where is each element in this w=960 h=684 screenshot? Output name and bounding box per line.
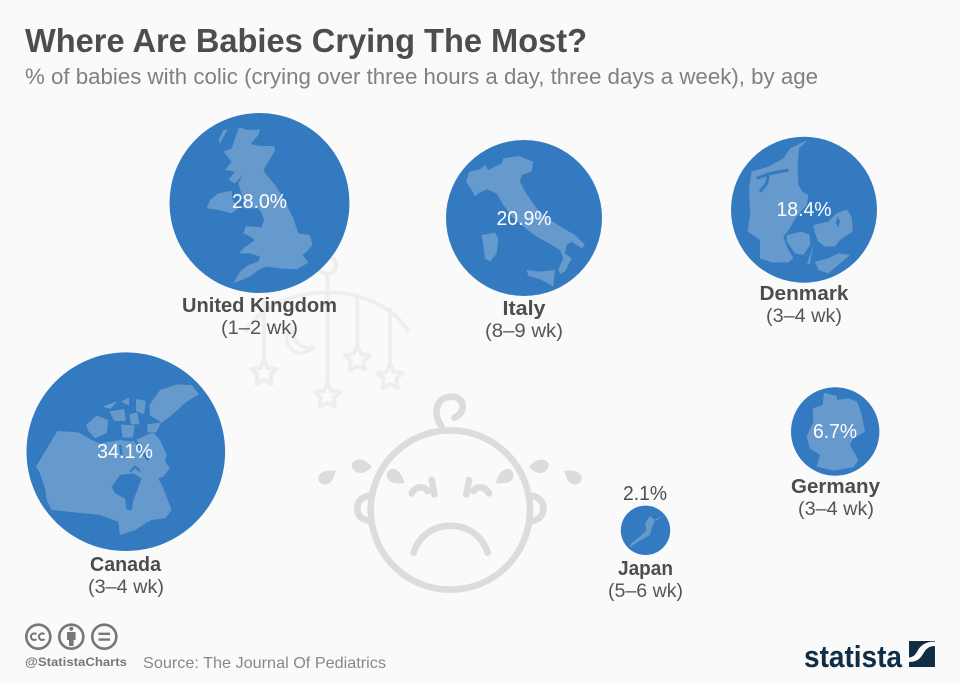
bubble: United Kingdom <box>170 113 350 339</box>
map: Germany <box>807 393 865 471</box>
bubble: Denmark <box>731 137 877 327</box>
label: Japan: Japan <box>618 558 673 580</box>
icon: statista mark <box>909 641 935 667</box>
icon: baby mobile <box>246 256 408 407</box>
bubble: Japan <box>608 483 683 602</box>
logo: statista: statista <box>804 639 903 674</box>
map: Japan <box>630 515 665 547</box>
age: Germany: (3–4 wk) <box>798 499 874 520</box>
label: United Kingdom: United Kingdom <box>182 295 337 317</box>
title: Where Are Babies Crying The Most? <box>25 22 587 59</box>
map: Canada <box>36 384 199 535</box>
value: United Kingdom: 28.0% <box>232 191 287 213</box>
label: Italy: Italy <box>502 298 546 320</box>
bubble: Italy <box>446 140 602 342</box>
label: Germany: Germany <box>791 476 881 498</box>
handle: @StatistaCharts <box>25 655 127 669</box>
value: Denmark: 18.4% <box>776 199 832 221</box>
age: Italy: (8–9 wk) <box>485 321 563 342</box>
icon: crying baby face <box>318 397 582 590</box>
source: Source: The Journal Of Pediatrics <box>143 655 386 672</box>
bubble: Canada <box>26 352 225 598</box>
label: Canada: Canada <box>90 554 162 576</box>
value: Italy: 20.9% <box>496 208 552 230</box>
age: Denmark: (3–4 wk) <box>766 306 842 327</box>
map: Denmark <box>748 140 853 273</box>
age: Canada: (3–4 wk) <box>88 577 164 598</box>
map: Italy <box>466 156 585 287</box>
age: United Kingdom: (1–2 wk) <box>221 318 298 339</box>
age: Japan: (5–6 wk) <box>608 581 683 602</box>
value: Japan: 2.1% <box>623 483 667 505</box>
map: United Kingdom <box>207 127 312 283</box>
icon: creative commons licence <box>26 625 116 649</box>
label: Denmark: Denmark <box>760 283 849 305</box>
subtitle: % of babies with colic (crying over three hours a day, three days a week), by age <box>25 64 818 89</box>
value: Germany: 6.7% <box>813 421 857 443</box>
bubble: Germany <box>791 387 881 520</box>
value: Canada: 34.1% <box>97 441 153 463</box>
